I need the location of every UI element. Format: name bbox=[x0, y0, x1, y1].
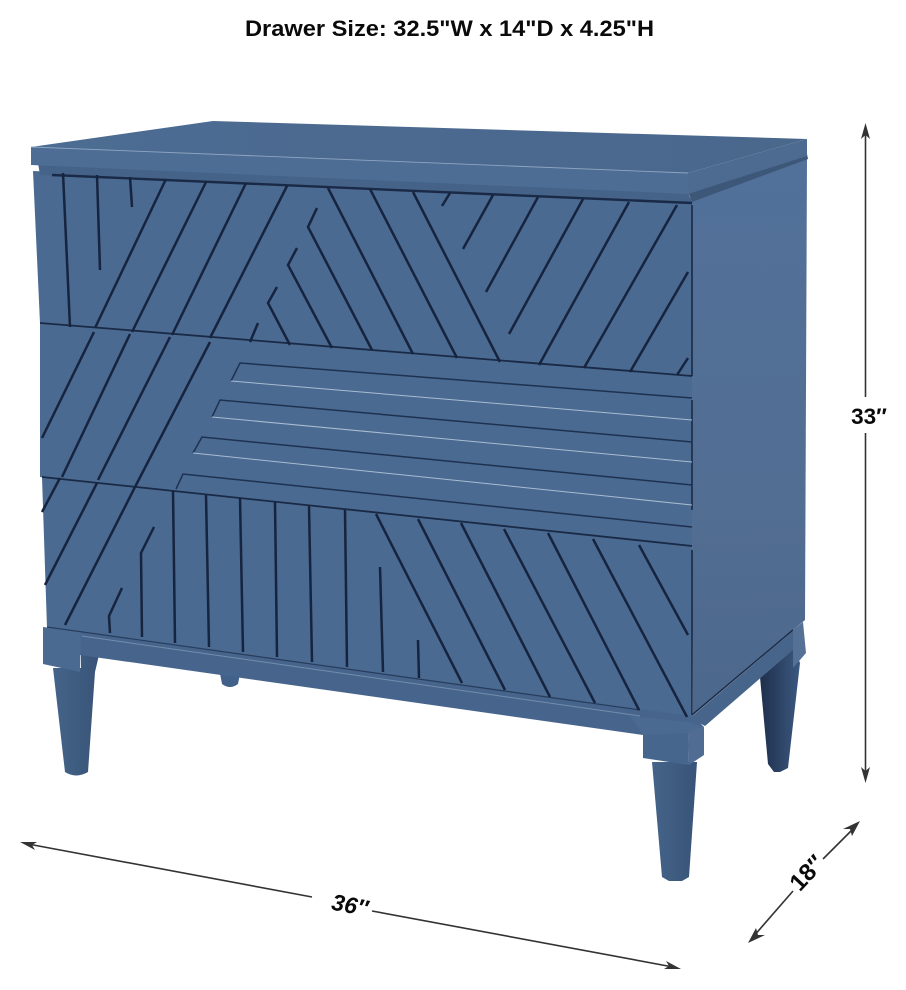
side rail bbox=[690, 631, 793, 726]
dimension: width 36 inches bbox=[20, 842, 681, 969]
right leg bbox=[760, 645, 800, 772]
drawer 1 bbox=[33, 171, 692, 376]
dimension: depth 18 inches: 18″ bbox=[784, 850, 831, 897]
side edge bbox=[688, 139, 807, 194]
base bbox=[43, 622, 806, 765]
legs bbox=[53, 645, 800, 881]
front corner block bbox=[643, 723, 689, 765]
cabinet side panel bbox=[690, 158, 807, 715]
dimension: height 33 inches bbox=[851, 123, 887, 783]
lip side shadow bbox=[688, 154, 808, 202]
top surface bbox=[31, 121, 807, 173]
drawer 3 grooves bbox=[42, 478, 688, 717]
drawer 1 grooves bbox=[63, 173, 688, 375]
horizontal relief lines bbox=[176, 363, 692, 527]
left corner block bbox=[43, 627, 81, 672]
dimension: depth 18 inches bbox=[748, 821, 860, 943]
drawer 3 bbox=[42, 477, 692, 716]
title: drawer size: Drawer Size: 32.5"W x 14"D x 4.25"H bbox=[245, 16, 654, 41]
dimension: height 33 inches: 33″ bbox=[851, 404, 887, 429]
front rail bbox=[44, 627, 704, 735]
front edge bbox=[31, 147, 688, 194]
drawer 2 bbox=[40, 323, 692, 546]
drawer 2 grooves bbox=[42, 332, 692, 527]
back leg bbox=[219, 668, 241, 687]
drawer seams bbox=[40, 175, 692, 715]
dimension: width 36 inches: 36″ bbox=[330, 889, 371, 921]
left leg bbox=[53, 655, 99, 776]
cabinet top bbox=[31, 121, 808, 203]
right corner block bbox=[793, 622, 806, 668]
front leg bbox=[652, 762, 697, 881]
lip below top bbox=[38, 163, 692, 203]
drawer front panels bbox=[33, 171, 692, 716]
